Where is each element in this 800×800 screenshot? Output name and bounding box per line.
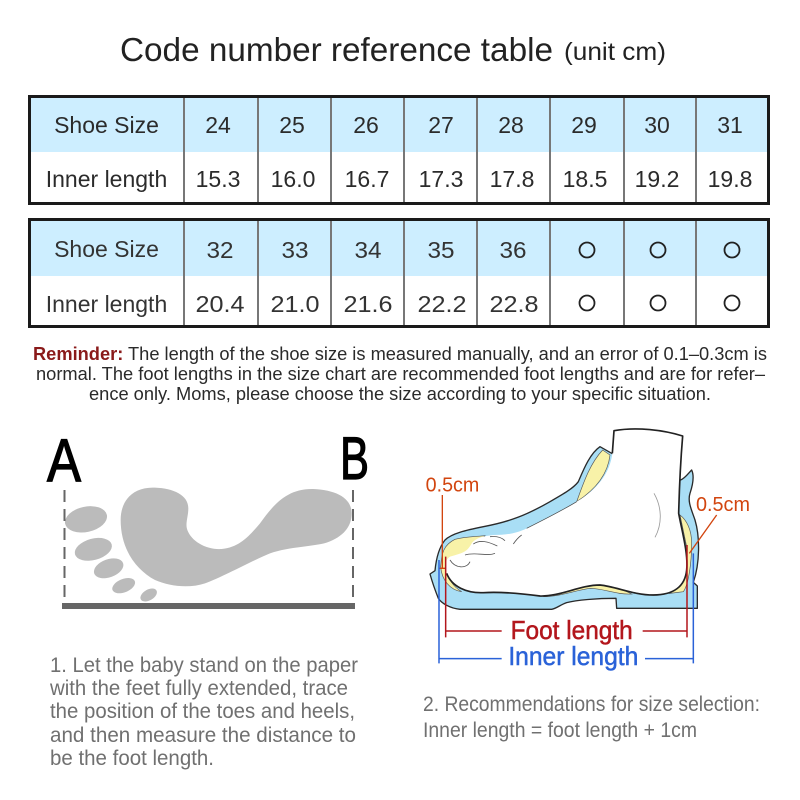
foot length dimension — [446, 545, 687, 637]
size table: sizes 32 to 36 — [29, 219, 769, 327]
header row labels: 24 — [205, 112, 231, 138]
table border — [30, 220, 768, 326]
base line — [62, 603, 355, 609]
inner length row: 17.8 — [490, 166, 534, 192]
step 1 instructions: 1. Let the baby stand on the paper — [50, 654, 358, 677]
label B: B — [340, 425, 369, 492]
inner length dimension — [439, 553, 693, 663]
title: (unit cm) — [564, 38, 666, 66]
foot outline — [447, 429, 687, 596]
inner length row: 22.2 — [418, 291, 466, 317]
shoe — [430, 447, 699, 609]
label: inner length: Inner length — [508, 641, 638, 671]
footprint — [62, 488, 352, 604]
foot — [446, 429, 687, 596]
inner length row: 17.3 — [419, 166, 463, 192]
label A: A — [47, 427, 81, 494]
inner length row — [46, 166, 752, 192]
step 1 instructions: be the foot length. — [50, 747, 214, 770]
table border — [30, 96, 768, 204]
header row labels: 33 — [282, 237, 308, 263]
inner length row: 16.0 — [271, 166, 315, 192]
header row labels: 36 — [500, 237, 526, 263]
inner length row: 21.0 — [270, 291, 320, 317]
label: foot length: Foot length — [511, 615, 633, 645]
inner length row: Inner length — [46, 291, 167, 317]
inner length row: 19.8 — [708, 166, 752, 192]
header row labels: 32 — [206, 237, 234, 263]
title: Code number reference table — [120, 31, 553, 68]
step 2 recommendation: 2. Recommendations for size selection: — [423, 693, 760, 716]
inner length row: Inner length — [46, 166, 167, 192]
inner length row: 20.4 — [196, 291, 245, 317]
header row labels: 26 — [353, 112, 379, 138]
step 2 recommendation: Inner length = foot length + 1cm — [423, 719, 697, 742]
header row labels: 30 — [644, 112, 670, 138]
orange 0.5cm markers — [439, 495, 717, 568]
step 2 recommendation — [423, 693, 760, 742]
dashed guide lines — [64, 490, 353, 603]
instep outline — [527, 502, 577, 528]
header row labels: Shoe Size — [54, 112, 159, 138]
column dividers — [184, 219, 696, 327]
column dividers — [184, 96, 696, 204]
toe and ankle details — [450, 493, 660, 567]
diagram: footprint measured from A to B — [47, 425, 369, 609]
reminder text: ence only. Moms, please choose the size according to your specific situation. — [89, 384, 711, 404]
label: left 0.5cm: 0.5cm — [426, 473, 479, 496]
inner length row: 15.3 — [196, 166, 240, 192]
inner length row: 21.6 — [344, 291, 392, 317]
empty size markers — [580, 242, 740, 310]
header row labels — [54, 112, 743, 138]
step 1 instructions: and then measure the distance to — [50, 724, 356, 747]
header row labels: 34 — [354, 237, 382, 263]
inner length row: 16.7 — [345, 166, 389, 192]
header row labels: 28 — [498, 112, 524, 138]
header row labels — [54, 236, 526, 263]
header row labels: 31 — [717, 112, 743, 138]
header row labels: 35 — [428, 237, 454, 263]
size table: sizes 24 to 31 — [29, 96, 769, 204]
inner length row — [46, 291, 538, 317]
step 1 instructions: with the feet fully extended, trace — [49, 677, 348, 700]
header row labels: Shoe Size — [54, 236, 159, 262]
inner length row: 19.2 — [635, 166, 679, 192]
header row labels: 27 — [428, 112, 454, 138]
header row background — [29, 96, 769, 152]
header row labels: 25 — [279, 112, 305, 138]
inner length row: 22.8 — [490, 291, 538, 317]
step 1 instructions — [49, 654, 358, 770]
inner length row: 18.5 — [563, 166, 607, 192]
diagram: foot inside shoe — [426, 429, 750, 671]
reminder text: Reminder: The length of the shoe size is measured manually, and an error of 0.1–0.3cm is — [33, 344, 767, 364]
step 1 instructions: the position of the toes and heels, — [50, 700, 355, 723]
reminder text: normal. The foot lengths in the size chart are recommended foot lengths and are for refer– — [36, 364, 765, 384]
reminder text — [33, 344, 767, 404]
header row background — [29, 219, 769, 276]
label: right 0.5cm: 0.5cm — [696, 493, 750, 516]
header row labels: 29 — [571, 112, 597, 138]
shoe lining — [441, 450, 692, 597]
